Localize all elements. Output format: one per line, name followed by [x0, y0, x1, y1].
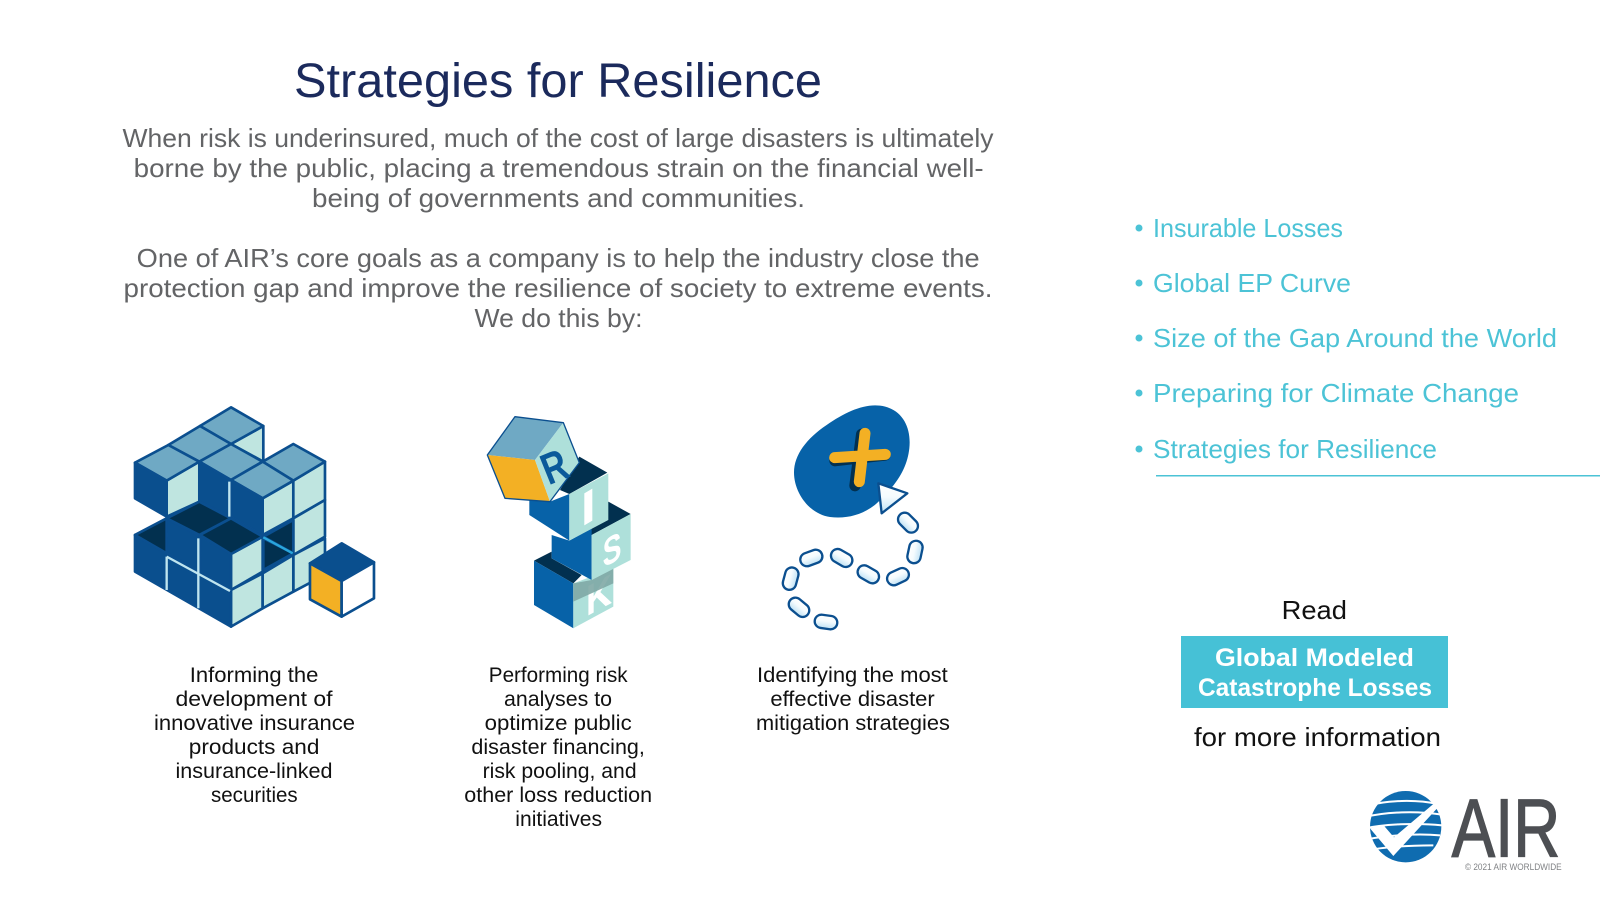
block K	[534, 552, 613, 628]
read label: Read	[1282, 595, 1347, 625]
intro text block: One of AIR’s core goals as a company is to help the industry close the	[137, 243, 980, 273]
icon: stacked cubes	[135, 407, 374, 627]
caption: risk analyses: Performing risk	[489, 664, 628, 687]
sidebar navigation list: Global EP Curve	[1153, 268, 1351, 298]
block R	[487, 417, 579, 502]
block S: S	[603, 523, 622, 577]
sidebar navigation list: Preparing for Climate Change	[1153, 378, 1519, 408]
caption: insurance products: securities	[211, 784, 298, 807]
block R: R	[534, 440, 575, 495]
intro text block: When risk is underinsured, much of the cost of large disasters is ultimately	[122, 123, 994, 153]
caption: risk analyses: optimize public	[485, 712, 632, 735]
caption: insurance products: insurance-linked	[176, 760, 332, 783]
button: report link	[1181, 636, 1448, 708]
caption: risk analyses: disaster financing,	[471, 736, 645, 759]
dashes	[781, 510, 924, 630]
button: report link: Catastrophe Losses	[1198, 674, 1432, 702]
block S	[552, 502, 631, 580]
plus	[835, 433, 885, 482]
active item underline	[1156, 475, 1600, 476]
arrow head	[878, 483, 907, 513]
copyright: © 2021 AIR WORLDWIDE	[1465, 862, 1562, 872]
intro text block	[122, 123, 994, 333]
AIR logo	[1363, 782, 1562, 875]
caption: insurance products	[154, 664, 355, 807]
button: report link: Global Modeled	[1215, 644, 1414, 672]
caption: mitigation strategies: Identifying the most	[757, 664, 948, 687]
blob	[794, 405, 910, 517]
logo wordmark: AIR	[1452, 782, 1560, 875]
caption: mitigation strategies	[756, 664, 950, 735]
sidebar navigation list	[1136, 213, 1557, 464]
caption: risk analyses: initiatives	[515, 808, 602, 831]
intro text block: borne by the public, placing a tremendous strain on the financial well-	[134, 153, 984, 183]
icon: risk blocks	[487, 417, 631, 628]
logo globe	[1363, 791, 1442, 862]
caption: insurance products: development of	[176, 688, 333, 711]
caption: risk analyses: other loss reduction	[464, 784, 652, 807]
intro text block: being of governments and communities.	[312, 183, 805, 213]
sidebar navigation list: Strategies for Resilience	[1153, 434, 1437, 464]
sidebar navigation list: Size of the Gap Around the World	[1153, 323, 1557, 353]
caption: mitigation strategies: effective disaster	[770, 688, 935, 711]
title: Strategies for Resilience	[294, 55, 822, 108]
icon: mitigation path	[781, 405, 924, 630]
caption: insurance products: innovative insurance	[154, 712, 355, 735]
more information label: for more information	[1194, 722, 1441, 752]
sidebar navigation list: Insurable Losses	[1153, 213, 1343, 243]
intro text block: protection gap and improve the resilience of society to extreme events.	[124, 273, 992, 303]
caption: insurance products: Informing the	[190, 664, 318, 687]
block I	[529, 457, 608, 541]
plus shadow	[835, 434, 885, 486]
caption: risk analyses: analyses to	[504, 688, 612, 711]
caption: insurance products: products and	[189, 736, 319, 759]
caption: risk analyses: risk pooling, and	[483, 760, 637, 783]
caption: risk analyses	[464, 664, 652, 831]
caption: mitigation strategies: mitigation strategies	[756, 712, 950, 735]
intro text block: We do this by:	[474, 303, 642, 333]
block K: K	[586, 564, 612, 626]
